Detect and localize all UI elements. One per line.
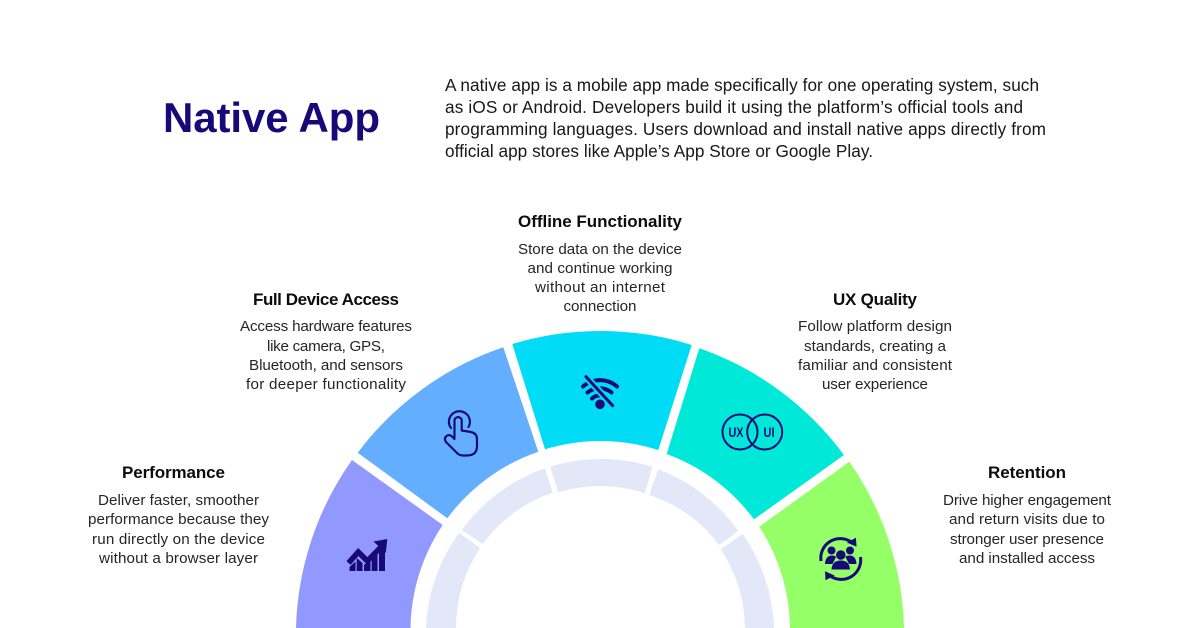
segment: retention	[759, 462, 904, 628]
intro paragraph	[445, 75, 1046, 161]
panel: offline functionality text: Offline Functionality	[518, 212, 683, 231]
panel: performance text: Performance	[122, 463, 225, 482]
segment: performance	[296, 460, 443, 628]
panel: retention text: Retention	[988, 463, 1066, 482]
panel: ux quality text: UX Quality	[833, 290, 918, 309]
panel: performance text: Deliver faster, smoother	[98, 492, 259, 509]
panel: offline functionality text: without an internet	[534, 279, 666, 296]
title: Native App	[163, 94, 380, 141]
panel: ux quality text: Follow platform design	[798, 318, 952, 335]
panel: full device access text: like camera, GPS,	[267, 338, 385, 355]
panel: offline functionality text: Store data on the device	[518, 241, 682, 258]
icon: touch gesture hand	[445, 411, 477, 456]
panel: offline functionality text: connection	[564, 298, 636, 315]
panel: performance text	[88, 463, 269, 567]
semicircle: inner light ring	[426, 459, 774, 628]
segment: offline functionality	[512, 331, 692, 450]
segment: full device access	[358, 347, 538, 518]
panel: performance text: without a browser layer	[98, 550, 258, 567]
semicircle: outer coloured segments	[296, 331, 904, 628]
intro paragraph: programming languages. Users download and install native apps directly from	[445, 119, 1046, 139]
panel: retention text: stronger user presence	[950, 531, 1104, 548]
icon: retention cycle with users	[821, 538, 861, 580]
panel: retention text: and installed access	[959, 550, 1095, 567]
panel: ux quality text	[798, 290, 953, 393]
panel: offline functionality text: and continue working	[528, 260, 672, 277]
panel: full device access text: Access hardware features	[240, 318, 412, 335]
panel: performance text: performance because they	[88, 511, 269, 528]
panel: full device access text: Full Device Access	[253, 290, 399, 309]
panel: retention text: Drive higher engagement	[943, 492, 1112, 509]
icon: ux ui circles: UX	[728, 424, 744, 440]
intro paragraph: A native app is a mobile app made specifically for one operating system, such	[445, 75, 1039, 95]
panel: offline functionality text	[518, 212, 683, 315]
panel: ux quality text: standards, creating a	[804, 338, 947, 355]
panel: full device access text: Bluetooth, and sensors	[249, 357, 403, 374]
panel: full device access text	[240, 290, 412, 393]
intro paragraph: official app stores like Apple’s App Store or Google Play.	[445, 141, 873, 161]
intro paragraph: as iOS or Android. Developers build it using the platform’s official tools and	[445, 97, 1023, 117]
icon: ux ui circles: UI	[764, 424, 774, 440]
panel: full device access text: for deeper functionality	[246, 376, 406, 393]
icon: growth chart	[348, 539, 387, 571]
panel: performance text: run directly on the device	[92, 531, 265, 548]
icon: wifi off	[583, 377, 617, 409]
panel: ux quality text: familiar and consistent	[798, 357, 953, 374]
panel: retention text	[943, 463, 1112, 567]
panel: retention text: and return visits due to	[949, 511, 1105, 528]
icon: ux ui circles	[722, 414, 782, 450]
panel: ux quality text: user experience	[822, 376, 928, 393]
segment: ux quality	[667, 348, 844, 519]
